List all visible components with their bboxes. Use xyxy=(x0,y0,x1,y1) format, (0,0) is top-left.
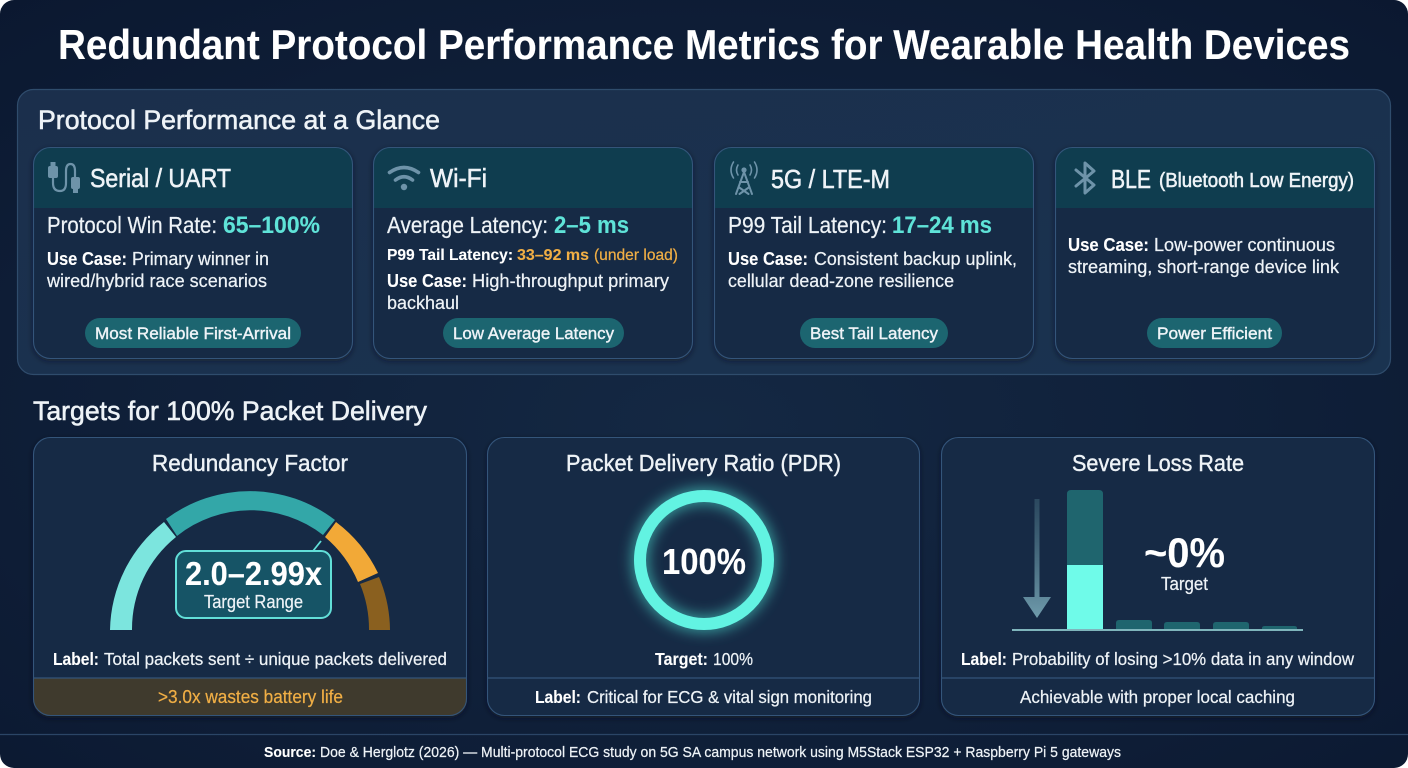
gauge chart xyxy=(110,491,390,630)
panel: protocol performance at a glance xyxy=(18,90,1390,374)
use case text: High-throughput primary xyxy=(472,271,669,291)
badge xyxy=(1147,318,1282,348)
warning note: >3.0x wastes battery life xyxy=(158,687,343,707)
footer: source: Source: xyxy=(264,745,316,761)
use case text xyxy=(46,249,269,291)
metric: average latency: 2–5 ms xyxy=(554,212,629,239)
card heading xyxy=(1111,164,1354,194)
use case text: streaming, short-range device link xyxy=(1068,257,1340,277)
metric: p99 tail latency: P99 Tail Latency: xyxy=(728,212,887,238)
badge: Power Efficient xyxy=(1157,324,1272,343)
card heading: BLE xyxy=(1111,164,1151,194)
card heading: 5G / LTE-M xyxy=(771,164,890,194)
metric: p99 tail latency: 33–92 ms xyxy=(517,247,589,264)
card: Wi-Fi xyxy=(373,147,693,359)
badge: Low Average Latency xyxy=(453,324,614,343)
footer: source: Doe & Herglotz (2026) — Multi-protocol ECG study on 5G SA campus network using M5Stack ESP32 + Raspberry Pi 5 gateways xyxy=(320,745,1121,761)
panel: severe loss rate xyxy=(941,437,1375,716)
use case text: backhaul xyxy=(387,293,459,313)
note text: Achievable with proper local caching xyxy=(1020,687,1295,707)
badge xyxy=(443,318,624,348)
use case text xyxy=(387,271,669,313)
panel: redundancy factor xyxy=(33,437,467,716)
label text: Label: xyxy=(535,687,581,707)
card heading: Severe Loss Rate xyxy=(1072,450,1244,476)
card: BLE xyxy=(1055,147,1375,359)
heading: protocol performance: Protocol Performance at a Glance xyxy=(38,105,440,135)
use case text: Use Case: xyxy=(728,249,808,269)
card heading: Serial / UART xyxy=(90,163,231,193)
label text: Probability of losing >10% data in any window xyxy=(1012,649,1354,669)
label text: Label: xyxy=(961,649,1007,669)
arrow: downward trend xyxy=(1023,499,1051,618)
target text xyxy=(655,649,753,669)
use case text: cellular dead-zone resilience xyxy=(728,271,954,291)
target text: 100% xyxy=(713,649,753,669)
callout: target range: 2.0–2.99x xyxy=(185,555,323,592)
target text: Target: xyxy=(655,649,708,669)
badge: Best Tail Latency xyxy=(810,324,938,343)
metric: average latency: Average Latency: xyxy=(387,212,548,238)
card heading: Redundancy Factor xyxy=(152,450,348,476)
stat: ~0% target: Target xyxy=(1161,574,1208,594)
callout: target range xyxy=(176,541,331,618)
footer: source xyxy=(0,734,1408,761)
use case text: Use Case: xyxy=(1068,235,1149,255)
badge: Most Reliable First-Arrival xyxy=(95,324,291,343)
card: Serial / UART xyxy=(33,147,353,359)
card heading: Wi-Fi xyxy=(430,163,487,193)
stat: ~0% target: ~0% xyxy=(1144,529,1225,576)
ring chart: 100%: 100% xyxy=(662,541,746,582)
use case text: Low-power continuous xyxy=(1154,235,1335,255)
badge xyxy=(85,318,301,348)
metric: p99 tail latency xyxy=(387,247,678,264)
icon: bluetooth xyxy=(1076,163,1094,193)
callout: target range: Target Range xyxy=(204,592,303,612)
use case text: wired/hybrid race scenarios xyxy=(46,271,267,291)
use case text: Use Case: xyxy=(387,271,467,291)
heading: targets: Targets for 100% Packet Delivery xyxy=(33,396,427,426)
card heading: (Bluetooth Low Energy) xyxy=(1159,170,1354,192)
use case text: Use Case: xyxy=(47,249,127,269)
use case text: Primary winner in xyxy=(132,249,269,269)
label text: Label: xyxy=(53,649,99,669)
label text: Critical for ECG & vital sign monitoring xyxy=(587,687,872,707)
card: 5G / LTE-M xyxy=(714,147,1034,359)
use case text xyxy=(1068,235,1340,277)
card heading: Packet Delivery Ratio (PDR) xyxy=(566,450,841,476)
metric: p99 tail latency xyxy=(728,212,992,239)
icon: cell tower xyxy=(731,162,757,194)
use case text xyxy=(728,249,1017,291)
metric: p99 tail latency: 17–24 ms xyxy=(892,212,992,239)
label text: Total packets sent ÷ unique packets delivered xyxy=(104,649,447,669)
use case text: Consistent backup uplink, xyxy=(814,249,1017,269)
badge xyxy=(800,318,948,348)
icon: wifi xyxy=(390,168,418,190)
ring chart: 100% xyxy=(640,496,768,624)
metric: win rate: Protocol Win Rate: xyxy=(47,212,217,238)
bar chart: loss distribution xyxy=(1012,490,1303,631)
metric: p99 tail latency: P99 Tail Latency: xyxy=(387,247,513,264)
icon: serial cable xyxy=(48,162,80,193)
stat: ~0% target xyxy=(1144,529,1225,594)
metric: win rate: 65–100% xyxy=(223,212,320,239)
metric: win rate xyxy=(47,212,320,239)
metric: p99 tail latency: (under load) xyxy=(594,247,678,264)
panel: packet delivery ratio xyxy=(487,437,920,716)
